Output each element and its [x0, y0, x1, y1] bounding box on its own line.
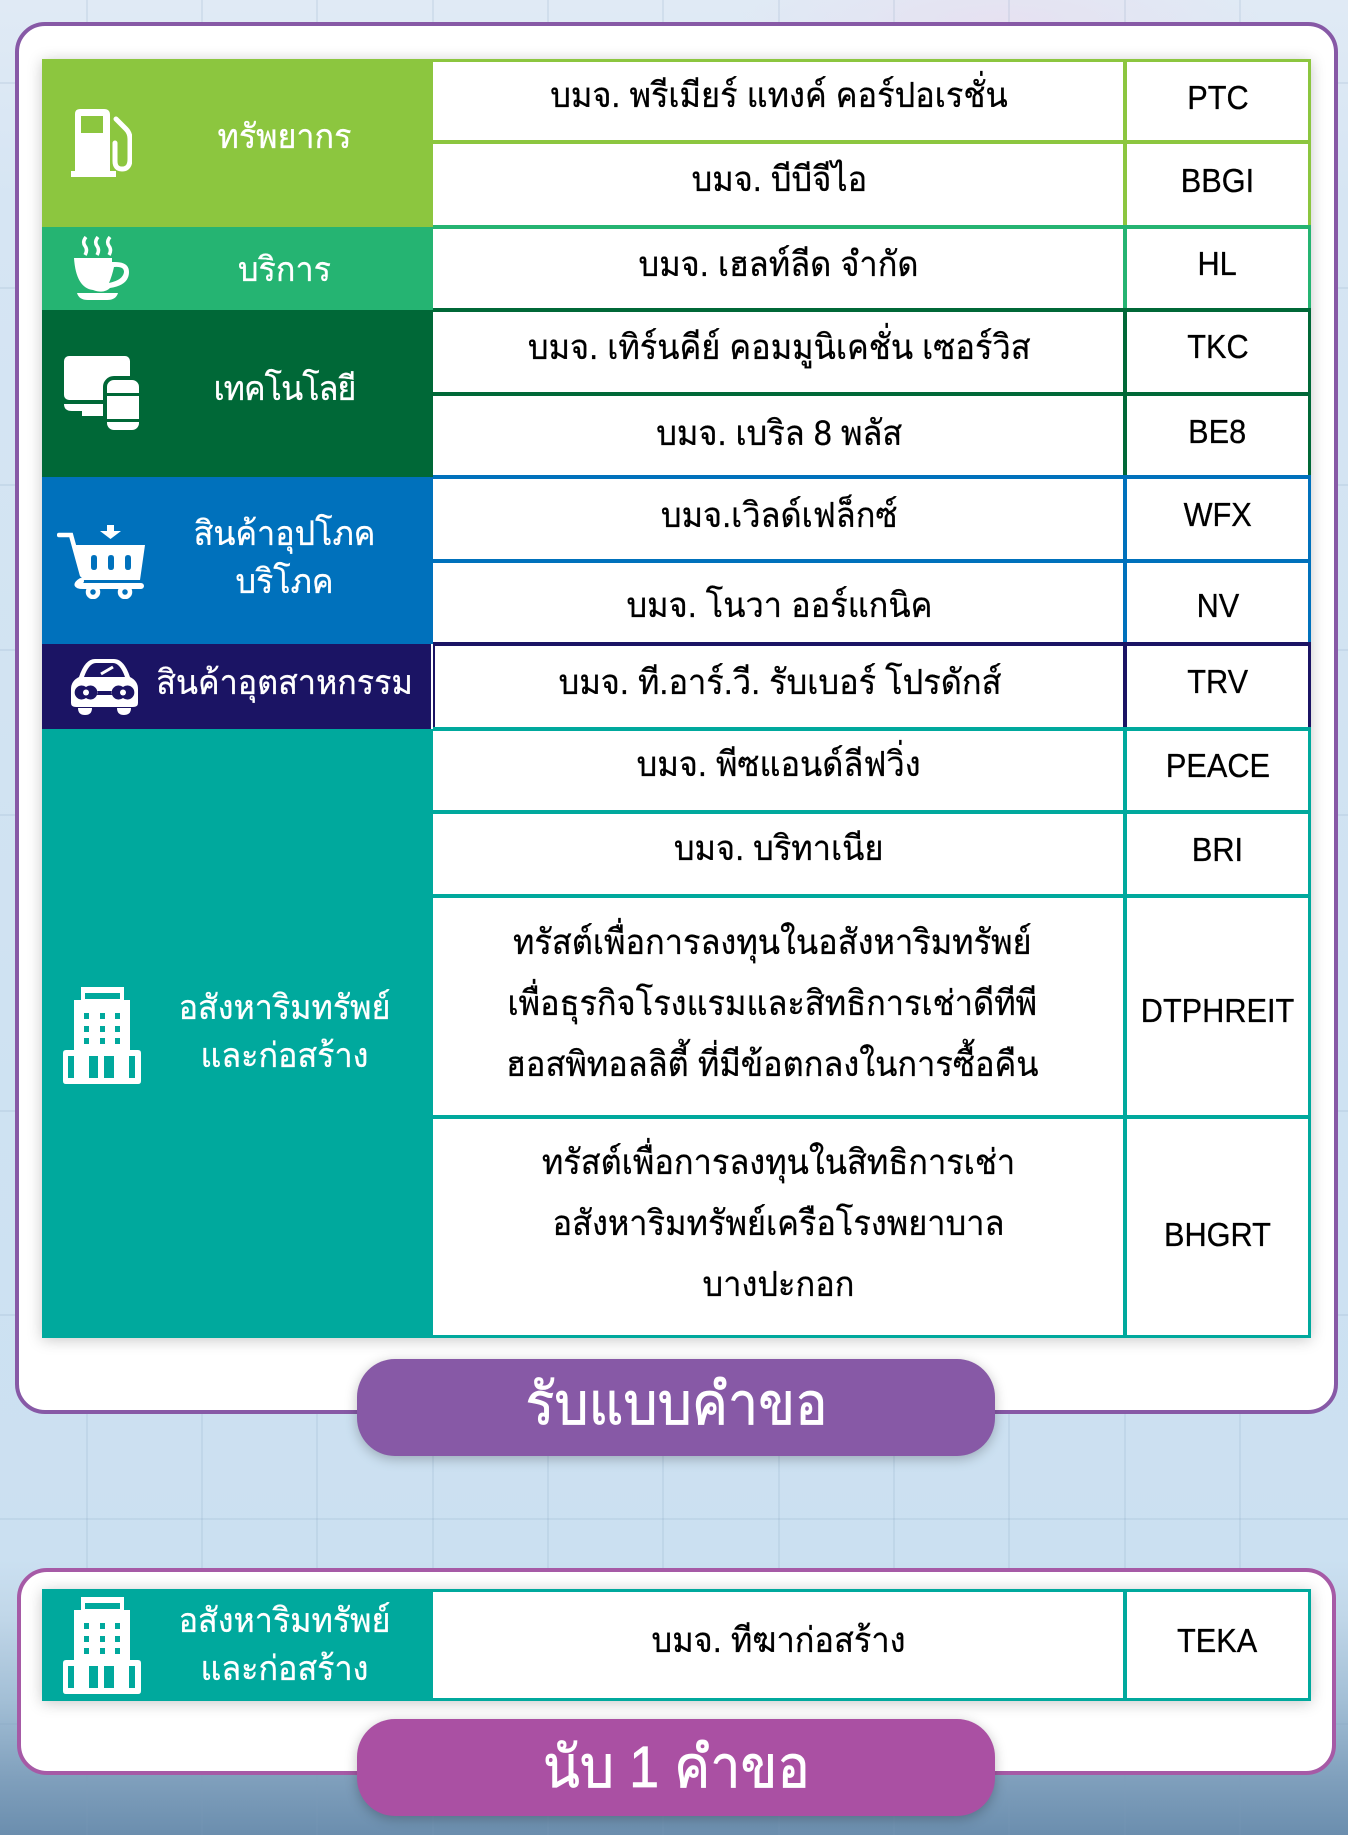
- ticker: DTPHREIT: DTPHREIT: [1141, 992, 1294, 1029]
- ticker: BRI: [1123, 810, 1311, 898]
- pill: one application heading: [357, 1719, 995, 1816]
- pill: fast-track heading: [357, 1359, 995, 1456]
- row: BE8: [433, 392, 1125, 479]
- category: industrials: [42, 644, 431, 729]
- row: DTPHREIT: เพื่อธุรกิจโรงแรมและสิทธิการเช่าดีทีพี: [507, 984, 1037, 1022]
- icon: computer and phone: [64, 356, 139, 430]
- row: BHGRT: อสังหาริมทรัพย์เครือโรงพยาบาล: [553, 1204, 1005, 1242]
- ticker: BHGRT: [1123, 1115, 1311, 1338]
- ticker: TEKA: TEKA: [1177, 1622, 1258, 1659]
- row: BRI: บมจ. บริทาเนีย: [674, 828, 884, 868]
- label: resources: ทรัพยากร: [218, 118, 351, 156]
- ticker: BRI: BRI: [1192, 830, 1243, 868]
- ticker: BE8: [1123, 392, 1311, 479]
- icon: car: [71, 659, 138, 715]
- ticker: TKC: [1123, 308, 1311, 395]
- row: BRI: [433, 810, 1125, 898]
- label: consumer goods: บริโภค: [235, 563, 334, 601]
- ticker: BHGRT: BHGRT: [1164, 1216, 1271, 1253]
- ticker: NV: [1123, 559, 1311, 646]
- row: NV: [433, 559, 1125, 646]
- label: property and construction: และก่อสร้าง: [201, 1037, 368, 1075]
- category: services: [42, 227, 433, 310]
- icon: coffee cup: [74, 236, 129, 300]
- row: WFX: บมจ.เวิลด์เฟล็กซ์: [661, 496, 897, 534]
- ticker: NV: NV: [1196, 587, 1239, 624]
- row: PTC: บมจ. พรีเมียร์ แทงค์ คอร์ปอเรชั่น: [550, 76, 1008, 114]
- ticker: DTPHREIT: [1123, 894, 1311, 1119]
- row: PEACE: [433, 727, 1125, 814]
- ticker: PEACE: [1123, 727, 1311, 814]
- row: TEKA: [433, 1589, 1125, 1701]
- panel: accepted one application: [17, 1568, 1336, 1775]
- ticker: WFX: WFX: [1183, 496, 1252, 532]
- label: technology: เทคโนโลยี: [214, 370, 355, 408]
- label: services: บริการ: [238, 251, 331, 289]
- row: DTPHREIT: ทรัสต์เพื่อการลงทุนในอสังหาริมทรัพย์: [513, 922, 1031, 962]
- row: BBGI: [433, 140, 1125, 228]
- table: TEKA: [42, 1589, 1311, 1701]
- label: property and construction: อสังหาริมทรัพย์: [179, 989, 390, 1027]
- panel: main list: [15, 22, 1338, 1414]
- label: industrials: สินค้าอุตสาหกรรม: [156, 664, 413, 702]
- ticker: PTC: [1123, 59, 1311, 144]
- icon: shopping cart: [57, 525, 145, 599]
- icon: fuel pump: [71, 109, 132, 177]
- row: NV: บมจ. โนวา ออร์แกนิค: [626, 586, 932, 625]
- ticker: WFX: [1123, 475, 1311, 563]
- category: technology: [42, 310, 433, 477]
- ticker: TKC: TKC: [1187, 328, 1248, 365]
- label: property and construction: [179, 989, 390, 1075]
- category: property and construction (TEKA): [42, 1589, 433, 1701]
- row: BBGI: บมจ. บีบีจีไอ: [691, 160, 867, 198]
- category: property and construction: [42, 729, 433, 1338]
- row: BHGRT: ทรัสต์เพื่อการลงทุนในสิทธิการเช่า: [542, 1142, 1016, 1182]
- row: BHGRT: บางปะกอก: [703, 1264, 855, 1304]
- pill: one application heading: นับ 1 คำขอ: [543, 1735, 809, 1800]
- row: PEACE: บมจ. พีซแอนด์ลีฟวิ่ง: [637, 745, 921, 784]
- row: TKC: บมจ. เทิร์นคีย์ คอมมูนิเคชั่น เซอร์วิส: [528, 328, 1030, 367]
- row: TKC: [433, 308, 1125, 395]
- ticker: TRV: [1123, 642, 1311, 731]
- ticker: BBGI: BBGI: [1181, 162, 1254, 198]
- ticker: HL: [1123, 225, 1311, 312]
- ticker: BE8: BE8: [1188, 413, 1247, 450]
- label: consumer goods: สินค้าอุปโภค: [194, 515, 375, 553]
- row: HL: [433, 225, 1125, 312]
- ticker: TEKA: [1123, 1589, 1311, 1701]
- ticker: HL: HL: [1198, 245, 1237, 282]
- ticker: TRV: TRV: [1187, 663, 1248, 700]
- table: main companies: [42, 59, 1311, 1338]
- icon: building: [63, 1597, 141, 1694]
- category: resources: [42, 59, 433, 227]
- row: BE8: บมจ. เบริล 8 พลัส: [656, 414, 902, 453]
- row: HL: บมจ. เฮลท์ลีด จำกัด: [639, 245, 919, 284]
- row: TRV: บมจ. ที.อาร์.วี. รับเบอร์ โปรดักส์: [559, 663, 1001, 702]
- label: consumer goods: [194, 514, 375, 601]
- row: TEKA: บมจ. ทีฆาก่อสร้าง: [652, 1621, 906, 1660]
- ticker: BBGI: [1123, 140, 1311, 228]
- row: DTPHREIT: [433, 894, 1125, 1119]
- row: DTPHREIT: ฮอสพิทอลลิตี้ ที่มีข้อตกลงในการซื้อคืน: [506, 1044, 1038, 1084]
- ticker: PTC: PTC: [1187, 78, 1248, 116]
- ticker: PEACE: PEACE: [1165, 747, 1270, 784]
- row: BHGRT: [433, 1115, 1125, 1338]
- row: TRV: [433, 642, 1125, 731]
- icon: building: [63, 987, 141, 1084]
- label: property and construction: อสังหาริมทรัพย์: [179, 1602, 390, 1640]
- label: property and construction: [179, 1602, 390, 1688]
- category: consumer goods: [42, 477, 433, 644]
- label: property and construction: และก่อสร้าง: [201, 1650, 368, 1688]
- pill: fast-track heading: รับแบบคำขอ: [525, 1372, 827, 1437]
- row: PTC: [433, 59, 1125, 144]
- row: WFX: [433, 475, 1125, 563]
